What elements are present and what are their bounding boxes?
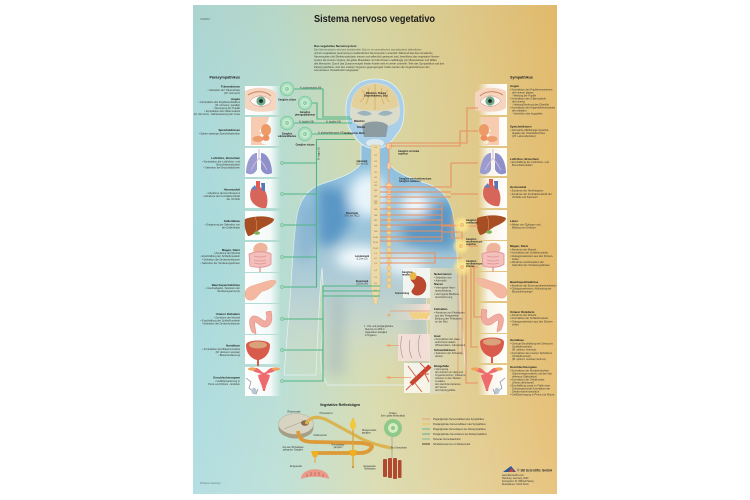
spinal column: L2 bbox=[374, 258, 377, 260]
legend: Postganglionäre Nervenfasern des Parasympathikus bbox=[433, 433, 487, 436]
head bbox=[346, 79, 404, 149]
spinal column: C5 bbox=[374, 172, 378, 174]
logo: Hamburg, Germany, 2004 bbox=[502, 477, 529, 480]
title: Sistema nervoso vegetativo bbox=[314, 14, 435, 25]
sympathetic effects text: deferens; Ejakulation) bbox=[512, 374, 537, 378]
parasympathetic effects text: • Steigerung der Sekretion von bbox=[205, 222, 241, 226]
parasympathetic effects text: Augen bbox=[231, 97, 240, 101]
sympathetic chain bbox=[386, 143, 392, 289]
icon: bladder bbox=[246, 340, 270, 366]
parasympathetic effects text: Gallenblase bbox=[224, 219, 240, 223]
spinal column: Th2 bbox=[374, 196, 378, 198]
icon: heart bbox=[250, 181, 267, 208]
sympathetic effects text: (Schließmuskel) bbox=[512, 354, 531, 358]
diagram labels: gelegener Ganglien bbox=[283, 448, 304, 452]
center organ text: • Adrenalin bbox=[434, 278, 447, 282]
sympathetic effects text: • Abnahme und Erweitern der bbox=[510, 260, 544, 264]
icon: pancreas bbox=[245, 280, 276, 300]
center organ text: • Verringerte Blutfluss- bbox=[434, 292, 460, 296]
center organ text: Fettzellen bbox=[434, 307, 448, 311]
anatomical labels: N. oculomotorius (III) bbox=[300, 86, 322, 90]
diagram title: Vegetative Reflexbögen bbox=[320, 403, 360, 407]
anatomical labels: (L1 bis L5) bbox=[357, 258, 368, 260]
center organ text: • Kontraktion der Haar- bbox=[434, 337, 461, 341]
logo bbox=[502, 466, 552, 486]
center organ text: an der Blut bbox=[435, 320, 448, 324]
legend: Präganglionäre Nervenzellfaserndes Sympathikus bbox=[433, 418, 485, 421]
anatomical labels: Mittelhirn bbox=[354, 120, 365, 123]
sympathetic effects text: (VII. Lebensfunktion) bbox=[512, 134, 536, 138]
spinal column: Th5 bbox=[374, 209, 378, 211]
diagram labels: Nur Sensorbein bbox=[391, 446, 408, 450]
parasympathetic effects text: der Gallenblase bbox=[222, 226, 241, 230]
spinal column: C6 bbox=[374, 177, 378, 179]
tiles: parasympathetic organs bbox=[245, 86, 281, 396]
center organ text: ausscheidung bbox=[435, 288, 452, 292]
sympathetic effects text: • Kontraktion des Pupillenerweiterers bbox=[510, 88, 553, 92]
sympathetic effects text: • Geringe Erschlaffung des Detrusors bbox=[510, 342, 554, 346]
sympathetic effects text: Bauchspeicheldrüse bbox=[510, 280, 539, 284]
sympathetic effects text: Blutzuckerspiegel bbox=[512, 290, 533, 294]
anatomical labels: organnahen Ganglien bbox=[365, 331, 388, 334]
parasympathetic effects text: Tränendrüsen bbox=[221, 84, 240, 88]
sympathetic effects text: • Schwache Zähflüssige Speichel- bbox=[510, 128, 549, 132]
icon: colon bbox=[250, 311, 272, 334]
icon: eye bbox=[245, 88, 276, 112]
sympathetic effects text: zellen bbox=[512, 322, 519, 326]
sympathetic effects text bbox=[510, 84, 557, 396]
anatomical labels bbox=[278, 86, 482, 337]
anatomical labels: mesentericum bbox=[466, 240, 482, 244]
human body bbox=[284, 79, 466, 385]
background bbox=[193, 5, 557, 494]
poster bbox=[193, 5, 557, 494]
sympathetic effects text: der inneren glatten bbox=[512, 90, 534, 94]
sympathetic effects text: • Glukagonsekretion, Abbindung der bbox=[510, 286, 552, 290]
icon: kidney bbox=[410, 272, 426, 295]
sympathetic effects text: Herzmuskel bbox=[510, 185, 526, 189]
diagram labels: (hier: glatte Muskulatur) bbox=[381, 414, 405, 418]
anatomical labels: (C1 bis C8) bbox=[356, 164, 368, 166]
center organ text: der Arterien im Haut und bbox=[435, 370, 464, 374]
sympathetic effects text: • Abnahme der Motorik bbox=[510, 248, 537, 252]
center organ text: der Venen bbox=[435, 385, 447, 389]
anatomical labels: Halsmark bbox=[357, 160, 368, 163]
print note: Printed in Germany bbox=[200, 482, 221, 485]
sympathetic effects text: Magen, Darm bbox=[510, 244, 529, 248]
anatomical labels: Brustmark bbox=[346, 212, 359, 215]
sympathetic effects text: Vorhöfe und Kammern bbox=[512, 195, 539, 199]
sympathetic effects text: - Hebung/Senkung des Oberlids bbox=[512, 102, 550, 106]
spinal column: Th4 bbox=[374, 203, 378, 205]
parasympathetic effects text: • Sekretion der Drüsenfunktionen bbox=[202, 258, 241, 262]
anatomical labels: pterygopalatinum bbox=[295, 114, 315, 116]
diagram labels: Vorderwurzel bbox=[313, 434, 327, 437]
anatomical labels: Mittelhirn, Brücke bbox=[366, 92, 387, 95]
sympathetic effects text: Speicheldrüsen bbox=[510, 124, 532, 128]
parasympathetic effects text: Bauchspeicheldrüse bbox=[212, 283, 240, 287]
icon: colon right bbox=[481, 309, 504, 332]
center organ text: aufrichtermuskeln bbox=[435, 340, 456, 344]
sympathetic ganglia bbox=[452, 216, 472, 277]
sympathetic effects text: Geschlechtsorgane bbox=[510, 365, 537, 369]
spinal column: Th11 bbox=[373, 242, 379, 244]
sympathetic effects text: • Kontraktion der Schließmuskeln bbox=[510, 250, 549, 254]
sympathetic effects text: (Uterus dehnbarer) bbox=[512, 380, 534, 384]
sympathetic effects text: • Abnahme der Motorik bbox=[510, 313, 537, 317]
sympathetic effects text: • Kontraktion der Muskelschichten bbox=[510, 368, 550, 372]
spinal column: S3 bbox=[374, 296, 378, 298]
sympathetic effects text: Bronchialmuskeln bbox=[512, 163, 533, 167]
sympathetic effects text: • Glukagonsekretion aus den Drüsen- bbox=[510, 320, 553, 324]
diagram labels: Aus den Wirbelsäule bbox=[282, 446, 304, 449]
sympathetic effects text: Gebärmuttermuskulatur bbox=[512, 390, 539, 394]
parasympathetic effects text: • Insulinabgabe, Sekretion der bbox=[205, 286, 240, 290]
sympathetic effects text: Bildung von Glukose bbox=[512, 226, 536, 230]
spinal column: C4 bbox=[374, 166, 378, 168]
icon: blood vessels bbox=[386, 363, 430, 393]
anatomical labels: Ganglion oticum bbox=[296, 144, 314, 146]
anatomical labels: Ganglion stellatum bbox=[399, 180, 421, 183]
parasympathetic effects text: Penis und Klitoris - Erektion bbox=[208, 382, 241, 386]
icon: salivary glands bbox=[251, 117, 271, 145]
parasympathetic effects text: Herzmuskel bbox=[224, 188, 240, 192]
sympathetic effects text: zellen bbox=[512, 257, 519, 261]
sympathetic effects text: (Samenwegsmuskeln und des Vas bbox=[512, 372, 552, 376]
anatomical labels: N. vagus (X) bbox=[318, 147, 320, 160]
afferent yellow fiber bbox=[306, 417, 392, 448]
spinal column: S1 bbox=[374, 283, 378, 285]
center organ text: Arterien in den Skelett- bbox=[435, 376, 462, 380]
diagram labels: Eingeweide- bbox=[364, 466, 377, 468]
center organ text: Bindung der Fettsäuren bbox=[435, 316, 463, 320]
sympathetic effects text: Sekretion der Verdauungsdrüsen bbox=[512, 263, 550, 267]
parasympathetic effects text: • Zunahme der Motorik bbox=[214, 316, 241, 320]
parasympathetic ganglia bbox=[280, 82, 312, 383]
anatomical labels: Brücke bbox=[357, 126, 366, 129]
intro text bbox=[314, 44, 445, 72]
spinal column: Th3 bbox=[374, 201, 378, 203]
anatomical labels: Lendenmark bbox=[355, 255, 370, 258]
parasympathetic effects text: (M. detrusor vesicae) bbox=[216, 350, 240, 354]
logo: © 3B Scientific GmbH bbox=[517, 468, 552, 472]
anatomical labels: Ganglion bbox=[466, 219, 477, 222]
icon: skin and hair bbox=[386, 334, 430, 361]
ganglion and nerve bbox=[311, 418, 357, 468]
parasympathetic effects text: Speicheldrüsen bbox=[218, 128, 240, 132]
intro text: momentanen Umweltreizen angepasst. bbox=[314, 68, 359, 72]
parasympathetic effects text: • Erschlaffung der Schließmuskeln bbox=[200, 254, 241, 258]
anatomical labels: superius bbox=[466, 243, 477, 246]
center organ text: Organbereichen; Dilatation bbox=[435, 373, 466, 377]
logo: Konzeption: Dr. Wilfried Hartog bbox=[502, 480, 534, 483]
anatomical labels: Grenzstrang bbox=[395, 292, 410, 295]
parasympathetic effects text: • Erschlaffung der Schließmuskeln bbox=[200, 318, 241, 322]
spinal column: C2 bbox=[374, 155, 378, 157]
parasympathetic effects text: • Starke wässrige Speichelsekretion bbox=[199, 132, 241, 136]
spinal column: Th9 bbox=[374, 231, 378, 233]
catalog number: VR0610 bbox=[200, 17, 211, 21]
icon: pancreas right bbox=[476, 278, 507, 298]
icon: salivary glands right bbox=[479, 117, 499, 145]
parasympathetic pathways bbox=[280, 82, 380, 383]
parasympathetic effects text: Bronchialmuskulatur bbox=[216, 162, 240, 166]
sympathetic effects text: Leber bbox=[510, 219, 519, 223]
intro text: Nervensystem die Skelettmuskulatur steuert und willentlich gesteuert wird, beeinflusst das vegetative Nerven- bbox=[314, 54, 440, 58]
diagram labels: Grenzstrang- bbox=[331, 444, 345, 446]
legend: Postganglionäre Nervenzellfasern des Sympathikus bbox=[433, 423, 486, 426]
spinal column: L5 bbox=[374, 277, 377, 279]
intro text: Das vegetative Nervensystem bbox=[314, 44, 357, 48]
anatomical labels: N. facialis (VII) bbox=[326, 122, 341, 124]
icon: gut right bbox=[482, 243, 504, 272]
intro text: system die inneren Organe, die glatte Muskulatur und die Drüsen unabhängig vom Bewusstsein und Willen bbox=[314, 58, 437, 62]
parasympathetic effects text: • Abnahme der Herzfrequenz bbox=[207, 191, 241, 195]
anatomical labels: Ganglion bbox=[402, 271, 413, 274]
center organ text: den Herzkranzarterien, bbox=[435, 382, 462, 386]
diagram labels: Rückenmarks- bbox=[362, 429, 377, 432]
center organ text: • Abnahme von Fettsäuren bbox=[434, 310, 465, 314]
sympathetic effects text: • Glukagonsekretion aus den Drüsen- bbox=[510, 254, 553, 258]
icon: eye right bbox=[475, 88, 506, 112]
reflex arc diagram bbox=[278, 403, 408, 479]
anatomical labels: in Organen bbox=[365, 334, 377, 337]
target organ green ring bbox=[384, 419, 402, 458]
spinal column: S2 bbox=[374, 290, 378, 292]
muscle bbox=[383, 458, 402, 479]
parasympathetic effects text: (VII. Hirnnerv) bbox=[224, 91, 240, 95]
spinal column: Th12 bbox=[373, 248, 379, 250]
anatomical labels: N. glossopharyngeus (IX) bbox=[318, 132, 344, 134]
sympathetic pathways bbox=[380, 108, 481, 383]
anatomical labels: inferius bbox=[466, 265, 475, 268]
center organ panel bbox=[386, 268, 462, 394]
sympathetic effects text: • Abnahme der Enzymsynthesesekretion bbox=[510, 284, 557, 288]
anatomical labels: Ganglion bbox=[466, 238, 477, 241]
left heading: Parasympathikus bbox=[209, 76, 240, 80]
center organ text: der Körpergefäße bbox=[435, 388, 456, 392]
parasympathetic effects text: • Sekretion der Drüsenfunktionen bbox=[202, 322, 241, 326]
spinal column: C1 bbox=[374, 147, 378, 149]
legend: Viszerale Nervenfaserbahn bbox=[433, 438, 461, 441]
parasympathetic effects text: • Kontraktion des Ciliarmuskels bbox=[204, 109, 241, 113]
center organ text: Blutgefäße bbox=[434, 364, 449, 368]
diagram labels bbox=[282, 410, 408, 470]
center organ text: Nebennieren bbox=[434, 272, 452, 276]
spinal column: L4 bbox=[374, 270, 377, 272]
parasympathetic effects text: • Zunahme der Motorik bbox=[214, 251, 241, 255]
icon: stomach and intestine bbox=[249, 243, 271, 272]
center organ text: drüsen bbox=[435, 354, 443, 358]
anatomical labels: Kreuzmark bbox=[356, 280, 369, 283]
sympathetic effects text: • Kontraktion der Gebärmutter bbox=[510, 378, 545, 382]
intro text: und ein vegetatives (autonomes) unwillentliches Nervensystem unterteilt. Während das das somatische bbox=[314, 51, 433, 55]
center organ text: Schweißdrüsen bbox=[434, 348, 456, 352]
parasympathetic effects text: Unterer Dickdarm bbox=[216, 312, 240, 316]
diagram labels: ganglion bbox=[362, 432, 371, 434]
spinal column: Th1 bbox=[374, 190, 378, 192]
center organ text: • Verringerte Harn- bbox=[434, 286, 456, 290]
center organ text: • Sekretion von bbox=[434, 276, 452, 280]
parasympathetic effects text: Geschlechtsorgane bbox=[213, 376, 240, 380]
parasympathetic effects text: (III. Hirnnerv) - Nahanpassung der Linse bbox=[194, 112, 241, 116]
sympathetic effects text: • Kontraktion der Schließmuskeln bbox=[510, 316, 549, 320]
sympathetic effects text: (M. sphinct. internus) bbox=[512, 348, 536, 352]
spinal column: C8 bbox=[374, 185, 378, 187]
diagram labels: Hinterwurzel bbox=[320, 412, 333, 415]
logo: www.3bscientific.com bbox=[502, 474, 524, 477]
center organ text: • Sekretion der Schweiß- bbox=[434, 351, 463, 355]
anatomical labels: Neurone im ZNS in bbox=[365, 328, 385, 331]
center organ text bbox=[434, 272, 466, 392]
icon: fat cells bbox=[388, 304, 430, 320]
anatomical labels: 1 - Prä- und postganglionäre bbox=[364, 325, 394, 328]
spinal column: Th10 bbox=[373, 237, 379, 239]
center organ text: • Verengung bbox=[434, 367, 449, 371]
parasympathetic effects text: • Sekretion der Verdauungsdrüsen bbox=[200, 261, 241, 265]
icon: reproductive organs bbox=[246, 367, 280, 394]
diagram labels: Rückenmark bbox=[288, 410, 301, 414]
spinal column: L3 bbox=[374, 263, 377, 265]
parasympathetic effects text: • Sekretion der Tränendrüse bbox=[208, 88, 241, 92]
sympathetic effects text: (M. sphinct. vesicae internus) bbox=[512, 357, 546, 361]
sympathetic effects text: • Kontraktion des Ciliarmuskels bbox=[510, 96, 546, 100]
sympathetic effects text: • Zunahme der Kontraktionskraft der bbox=[510, 192, 552, 196]
efferent orange tube bbox=[298, 431, 372, 453]
anatomical labels: Verlängertes Mark bbox=[344, 132, 365, 135]
sympathetic effects text: • Abbau von Glykogen und bbox=[510, 222, 541, 226]
sympathetic effects text: • Kontraktion des inneren Sphinkters bbox=[510, 351, 553, 355]
sympathetic effects text: Schwangerschaft Kontraktion der bbox=[512, 386, 550, 390]
icon: lungs right bbox=[480, 149, 506, 174]
diagram labels: ganglion bbox=[334, 447, 343, 449]
intro text: des Menschen. Durch das Zusammenspiel beider Anteile wird es weiter unterteilt: Teile des Sympathikus und des bbox=[314, 62, 445, 66]
torso and arms silhouette bbox=[284, 145, 466, 385]
anatomical labels: coeliacum bbox=[466, 222, 478, 224]
center organ text: durchströmung bbox=[435, 295, 453, 299]
spinal column bbox=[371, 145, 380, 304]
anatomical labels: Ganglion bbox=[282, 132, 293, 136]
sympathetic effects text: der inneren bbox=[512, 100, 526, 104]
anatomical labels: (S2 bis S4) bbox=[356, 284, 368, 286]
diagram labels: Muskulatur bbox=[364, 468, 376, 470]
intro text: Das Nervensystem wird aus funktioneller Sicht in ein animalisches (somatisches) willentliches bbox=[314, 48, 422, 52]
anatomical labels: Ganglion ciliare bbox=[278, 98, 297, 102]
icon: liver and gallbladder bbox=[245, 216, 274, 236]
anatomical labels: Ganglion bbox=[300, 111, 311, 114]
gland bbox=[301, 469, 329, 479]
tiles: sympathetic organs bbox=[471, 84, 507, 395]
sympathetic effects text: - Weitung der Pupille bbox=[512, 94, 537, 98]
parasympathetic effects text: • Kontraktion des Pupillenschließers bbox=[199, 100, 241, 104]
sympathetic effects text: abgabe der Unterkieferdrüse bbox=[512, 131, 546, 135]
torso shading bbox=[298, 173, 455, 375]
spinal cord disc bbox=[278, 414, 314, 438]
sympathetic effects text: • Erschlaffung der Luftröhren- und bbox=[510, 160, 549, 164]
sympathetic effects text: • Kontraktion des Augenhöhlenmuskels bbox=[510, 106, 556, 110]
anatomical labels: Ganglion bbox=[466, 260, 477, 263]
anatomical labels: Ganglion cervicale bbox=[398, 150, 420, 153]
right heading: Sympathikus bbox=[510, 76, 533, 80]
parasympathetic effects text: der Vorhöfe bbox=[227, 197, 241, 201]
parasympathetic effects text: • Abnahme der Kontraktionskraft bbox=[203, 194, 240, 198]
center organ text: Nieren bbox=[434, 282, 443, 286]
parasympathetic effects text: • Gefäßerweiterung in bbox=[215, 379, 241, 383]
legend: Schaltinterneuronen im Rückenmark bbox=[433, 443, 471, 446]
sympathetic effects text: • Zunahme der Herzfrequenz bbox=[510, 188, 544, 192]
anatomical labels: Ganglion cervicothoracicum bbox=[399, 178, 431, 180]
parasympathetic effects text: Luftröhre, Bronchien bbox=[211, 156, 240, 160]
parasympathetic effects text: • Kontraktion des Blasenmuskels bbox=[202, 347, 241, 351]
center organ text: (Piloarrektion, Gänsehaut) bbox=[435, 343, 465, 347]
anatomical labels: submandibulare bbox=[278, 135, 297, 138]
anatomical labels: (Hypothalamus, Sitz) bbox=[364, 94, 388, 98]
center organ text: Haut bbox=[434, 334, 440, 338]
parasympathetic effects text bbox=[194, 84, 241, 386]
parasympathetic effects text: - Verengung der Pupille bbox=[213, 106, 241, 110]
center organ text: muskeln, bbox=[435, 379, 446, 383]
anatomical labels: N. facialis (VII) bbox=[299, 122, 314, 124]
intro text: Parasympathikus, sind den meisten Organen gegengeregelt. Dabei werden die Organfunktionen den bbox=[314, 65, 430, 69]
spinal column: Th8 bbox=[374, 225, 378, 227]
parasympathetic effects text: Verdauungsenzyme bbox=[217, 289, 241, 293]
sympathetic effects text: der orbitalen bbox=[512, 108, 527, 112]
icon: bladder right bbox=[480, 338, 504, 363]
sympathetic effects text: - Vortreiben des Augapfels bbox=[512, 112, 543, 116]
center organ text: aus den Fettgewebe, bbox=[435, 314, 460, 318]
diagram labels: Drüsen bbox=[389, 412, 397, 415]
anatomical labels: mesentericum bbox=[466, 262, 482, 266]
legend bbox=[422, 418, 487, 446]
parasympathetic effects text: Harnblase bbox=[226, 344, 240, 348]
spinal column: Th6 bbox=[374, 215, 378, 217]
sympathetic effects text: • Erschlaffung sowie im Fallle einer bbox=[510, 384, 550, 388]
sympathetic effects text: Luftröhre, Bronchien bbox=[510, 157, 539, 161]
sympathetic effects text: Augen bbox=[510, 84, 519, 88]
icon: reproductive organs right bbox=[471, 367, 505, 394]
logo: Illustrationen: Ulrich Sturm bbox=[502, 483, 529, 486]
anatomical labels: (Th1 bis Th12) bbox=[345, 216, 360, 218]
sympathetic effects text: Harnblase bbox=[510, 338, 524, 342]
sympathetic effects text: Unterer Dickdarm bbox=[510, 310, 535, 314]
icon: liver right bbox=[477, 215, 506, 235]
spinal column: Th7 bbox=[374, 220, 378, 222]
anatomical labels: renalis bbox=[402, 274, 410, 276]
spinal column: C7 bbox=[374, 182, 378, 184]
sympathetic effects text: (Schließmuskeln) bbox=[512, 344, 532, 348]
spinal column: L1 bbox=[374, 253, 377, 255]
parasympathetic effects text: Magen, Darm bbox=[222, 248, 240, 252]
spinal column: C3 bbox=[374, 161, 378, 163]
sympathetic effects text: • Gefäßverengung in Penis und Klitoris bbox=[510, 392, 555, 396]
icon: lungs bbox=[246, 149, 272, 174]
icon: heart right bbox=[483, 179, 500, 206]
parasympathetic effects text: - Blasenentleerung bbox=[218, 353, 241, 357]
diagram labels: Eingeweide bbox=[290, 466, 303, 468]
parasympathetic effects text: (III. Hirnnerv; parallel) bbox=[215, 103, 240, 107]
parasympathetic effects text: • Kontraktion der Luftröhren- und bbox=[202, 160, 241, 164]
anatomical labels: superius bbox=[398, 152, 409, 156]
legend: Präganglionäre Nervenfasern des Parasympathikus bbox=[433, 428, 486, 431]
parasympathetic effects text: • Sekretion der Bronchialdrüsen bbox=[203, 166, 241, 170]
